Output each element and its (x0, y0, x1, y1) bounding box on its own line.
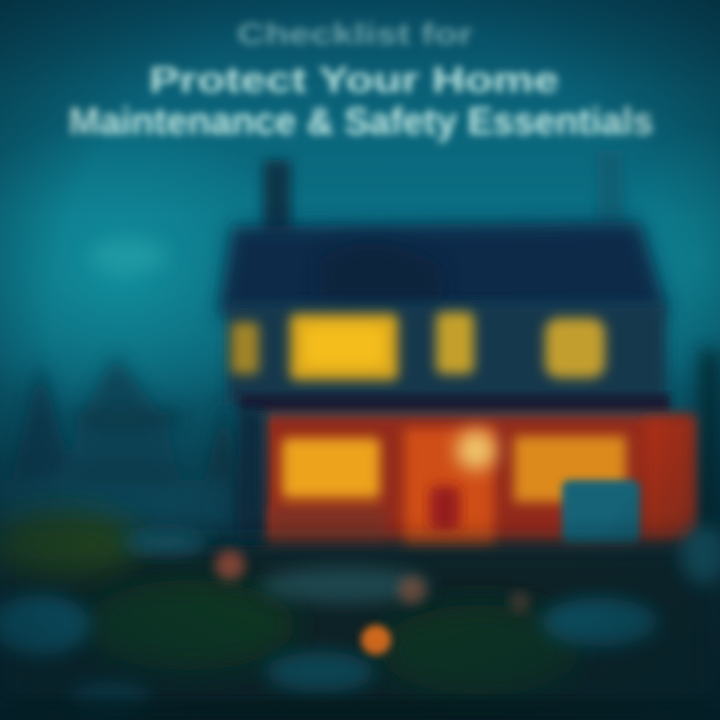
ground floor glow (270, 420, 691, 546)
porch lamp (456, 430, 496, 470)
roof (218, 222, 668, 316)
house (218, 150, 696, 546)
title: Maintenance & Safety Essentials (68, 101, 654, 143)
title: Protect Your Home (149, 59, 559, 100)
teal garage panel (562, 480, 640, 544)
title: Checklist for (237, 18, 473, 51)
title (68, 18, 654, 143)
door (430, 486, 460, 530)
upper storey wall (228, 304, 666, 406)
ground floor wall (264, 414, 696, 544)
eave shadow (240, 394, 670, 412)
chimneys (263, 150, 623, 235)
roof gable shadow (320, 244, 445, 300)
flowers (215, 550, 245, 580)
garden foreground (0, 513, 720, 720)
upper windows (231, 312, 605, 380)
background trees and distant house (0, 350, 720, 550)
